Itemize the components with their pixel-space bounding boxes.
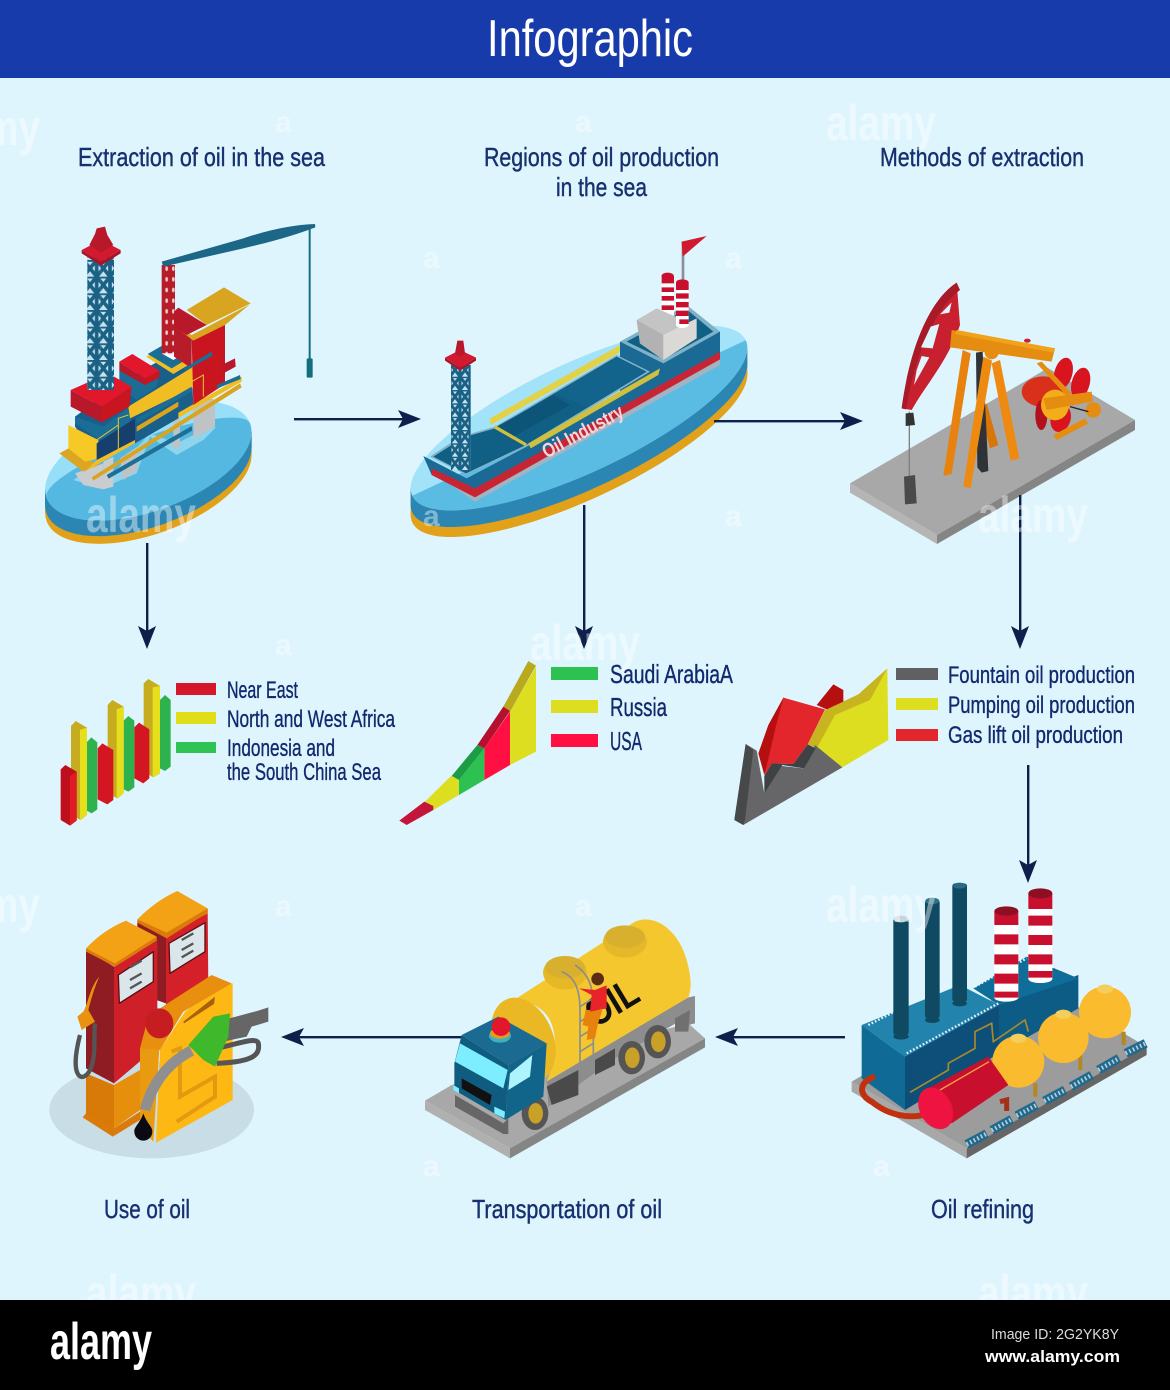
legend: bar chart: Near East xyxy=(227,677,298,704)
watermarks: a xyxy=(423,1150,440,1183)
legend: area chart: Saudi ArabiaA xyxy=(610,659,733,689)
heading: regions: Regions of oil production xyxy=(484,142,719,172)
watermarks: alamy xyxy=(86,1265,196,1321)
legend: bar chart: the South China Sea xyxy=(227,759,381,786)
legend: bar chart xyxy=(176,677,395,786)
heading: use of oil: Use of oil xyxy=(104,1194,190,1224)
footer bar: alamy xyxy=(50,1313,152,1371)
legend: mountain chart xyxy=(896,662,1135,749)
legend: bar chart: North and West Africa xyxy=(227,706,395,733)
watermarks: a xyxy=(725,242,742,275)
watermarks: a xyxy=(423,500,440,533)
arrow: truck to use xyxy=(281,1028,463,1046)
chart: isometric bars xyxy=(61,679,171,826)
chart: isometric mountain xyxy=(734,668,888,825)
heading: extraction: Extraction of oil in the sea xyxy=(78,142,325,172)
legend: mountain chart: Gas lift oil production xyxy=(948,722,1123,749)
icon: oil pump jack xyxy=(850,283,1135,544)
watermarks: alamy xyxy=(86,487,196,543)
watermarks: a xyxy=(275,106,292,139)
heading: regions xyxy=(484,142,719,202)
watermarks: a xyxy=(575,106,592,139)
icon: oil refinery xyxy=(852,883,1147,1158)
watermarks: a xyxy=(423,242,440,275)
watermarks: alamy xyxy=(826,95,936,151)
arrow: ship to area chart xyxy=(575,505,593,649)
arrow: rig to ship xyxy=(294,410,421,428)
icon: oil tanker ship xyxy=(389,236,769,572)
arrow: ship to pump xyxy=(714,412,863,430)
watermarks: a xyxy=(575,890,592,923)
heading: methods: Methods of extraction xyxy=(880,142,1084,172)
arrow: legend to refinery xyxy=(1019,765,1037,883)
icon: oil tanker truck: OIL xyxy=(577,970,647,1036)
footer bar xyxy=(0,1300,1170,1390)
legend: area chart xyxy=(551,659,733,756)
watermarks: alamy xyxy=(530,615,640,671)
header banner xyxy=(0,0,1170,78)
heading: regions: in the sea xyxy=(556,172,647,202)
watermarks: a xyxy=(725,500,742,533)
legend: area chart: Russia xyxy=(610,692,667,722)
header banner: Infographic xyxy=(487,10,693,68)
heading: refining: Oil refining xyxy=(931,1194,1034,1224)
icon: offshore oil rig xyxy=(29,224,315,568)
icon: oil tanker truck xyxy=(425,920,705,1158)
watermarks: a xyxy=(275,890,292,923)
legend: area chart: USA xyxy=(610,726,642,756)
chart: isometric area xyxy=(399,661,536,825)
arrow: refinery to truck xyxy=(715,1028,845,1046)
heading: transportation: Transportation of oil xyxy=(472,1194,662,1224)
arrow: rig to bar chart xyxy=(138,543,156,649)
legend: bar chart: Indonesia and xyxy=(227,735,335,762)
footer bar: www.alamy.com xyxy=(984,1347,1120,1366)
watermarks: alamy xyxy=(978,487,1088,543)
arrow: pump to mountain chart xyxy=(1011,495,1029,649)
watermarks: alamy xyxy=(826,877,936,933)
watermarks: a xyxy=(873,1150,890,1183)
icon: fuel pumps and jerry can xyxy=(49,891,268,1158)
icon: oil tanker ship: Oil Industry xyxy=(539,401,628,463)
footer bar: Image ID: 2G2YK8Y xyxy=(991,1326,1119,1343)
watermarks: a xyxy=(275,629,292,662)
watermarks: alamy xyxy=(978,1265,1088,1321)
